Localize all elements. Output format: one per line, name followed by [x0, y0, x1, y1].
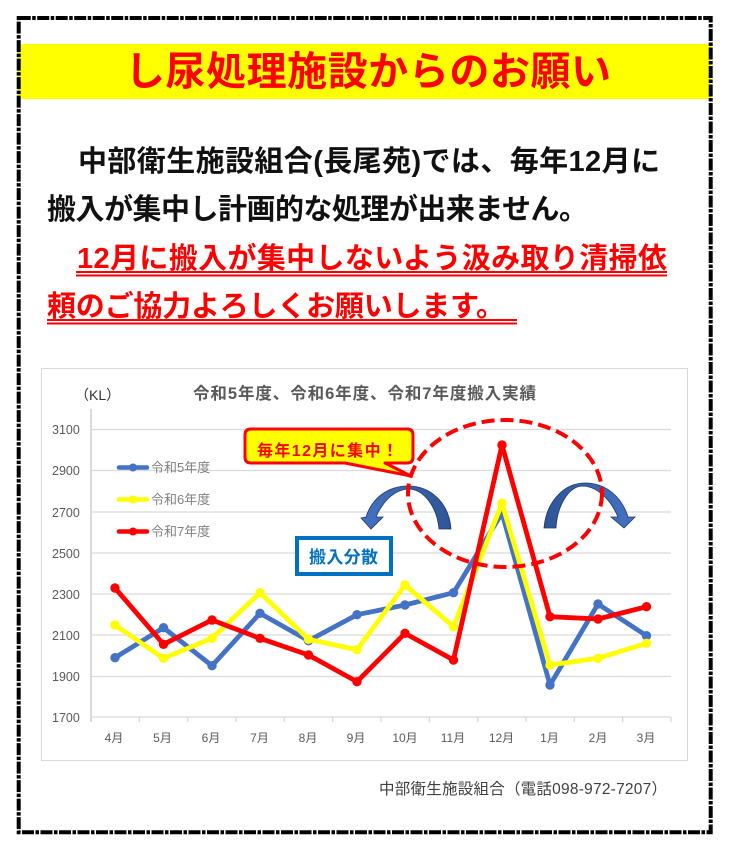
x axis labels	[105, 731, 655, 745]
legend	[119, 460, 210, 539]
y axis labels: 2900	[52, 464, 80, 478]
arrow: curved left	[361, 486, 451, 529]
request text in red with double underline: 頼のご協力よろしくお願いします。	[47, 289, 505, 323]
intro text: 中部衛生施設組合(長尾苑)では、毎年12月に	[78, 145, 660, 178]
y axis labels: 2500	[52, 547, 80, 561]
x axis labels: 7月	[250, 731, 269, 745]
series: 令和5年度	[110, 508, 651, 690]
x axis labels: 1月	[540, 731, 559, 745]
title banner	[18, 44, 711, 99]
legend: 令和5年度	[151, 460, 210, 475]
y axis labels: 2300	[52, 588, 80, 602]
x axis labels: 5月	[153, 731, 172, 745]
legend: 令和6年度	[151, 492, 210, 507]
chart title: 令和5年度、令和6年度、令和7年度搬入実績	[193, 383, 536, 403]
request text in red with double underline: 12月に搬入が集中しないよう汲み取り清掃依	[77, 241, 667, 275]
label box: 搬入分散	[297, 538, 391, 574]
y axis labels: 3100	[52, 423, 80, 437]
y axis labels: 2700	[52, 506, 80, 520]
x axis labels: 3月	[637, 731, 655, 745]
x axis labels: 10月	[392, 731, 418, 745]
series: 令和7年度	[110, 440, 651, 686]
request text in red with double underline	[47, 241, 667, 324]
series: 令和6年度	[110, 499, 651, 670]
legend: 令和7年度	[151, 524, 210, 539]
chart panel	[42, 368, 688, 760]
x axis labels: 2月	[589, 731, 607, 745]
label box: 搬入分散: 搬入分散	[309, 548, 378, 567]
footer contact: 中部衛生施設組合（電話098-972-7207）	[379, 780, 667, 798]
y axis unit: （KL）	[75, 387, 120, 403]
x axis labels: 9月	[347, 731, 365, 745]
x axis labels: 8月	[299, 731, 317, 745]
y axis labels: 1700	[52, 711, 80, 725]
dashed ellipse highlighting December	[408, 420, 602, 567]
x axis labels: 11月	[441, 731, 465, 745]
arrow: curved right	[544, 483, 635, 528]
title banner: し尿処理施設からのお願い	[125, 50, 611, 94]
x axis labels: 6月	[202, 731, 220, 745]
callout: 毎年12月に集中！	[245, 429, 413, 476]
intro text	[47, 145, 660, 226]
x axis labels: 4月	[105, 731, 123, 745]
callout: 毎年12月に集中！: 毎年12月に集中！	[257, 441, 398, 460]
x axis labels: 12月	[489, 731, 514, 745]
y axis labels	[52, 423, 80, 725]
y axis labels: 1900	[52, 670, 80, 684]
intro text: 搬入が集中し計画的な処理が出来ません。	[47, 192, 588, 226]
y axis labels: 2100	[52, 629, 80, 643]
gridlines and axes	[91, 409, 671, 722]
